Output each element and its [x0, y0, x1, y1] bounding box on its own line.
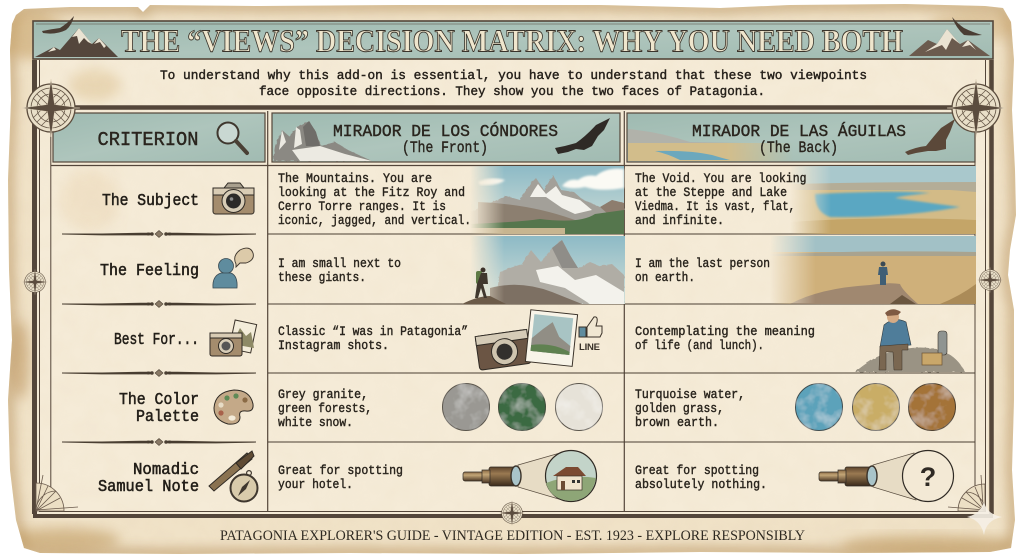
compass small left [22, 269, 48, 295]
text: back palette: golden grass, [635, 401, 724, 416]
row: color palette [119, 384, 956, 430]
text: front best for [278, 324, 468, 353]
compass rose top left [22, 79, 80, 137]
text: front subject: The Mountains. You are [278, 171, 432, 186]
text: front note: Great for spotting [278, 463, 403, 478]
text: back note [635, 463, 767, 492]
text: front subject [278, 171, 471, 228]
intro text [160, 68, 867, 99]
row: the subject: The Subject [102, 191, 199, 210]
text: back feeling [635, 256, 770, 285]
illustration: man sitting on rock with lunch [855, 309, 965, 372]
row dividers [62, 230, 975, 446]
illustration: camera, polaroid and like [475, 310, 602, 370]
text: back subject: Viedma. It is vast, flat, [635, 199, 795, 214]
text: front best for: Instagram shots. [278, 338, 389, 353]
text: front feeling: I am small next to [278, 256, 401, 271]
banner left mountain [35, 28, 118, 57]
swatch: turquoise water [796, 384, 842, 430]
illustration: lone figure on cliff [770, 236, 976, 304]
header: mirador de los condores: (The Front) [402, 139, 488, 157]
compass small bottom [499, 500, 525, 526]
banner right mountain [909, 29, 990, 56]
row: nomadic samuel note: Nomadic [133, 460, 199, 479]
header: criterion: CRITERION [98, 129, 198, 151]
text: front note [278, 463, 403, 492]
header: mirador de las aguilas: (The Back) [759, 139, 838, 157]
outer frame lines [33, 60, 993, 516]
text: front subject: looking at the Fitz Roy and [278, 185, 465, 200]
swatch: white snow [556, 384, 602, 430]
text: back note: absolutely nothing. [635, 477, 767, 492]
icon: artist palette [214, 390, 253, 424]
footer text: PATAGONIA EXPLORER'S GUIDE - VINTAGE EDITION - EST. 1923 - EXPLORE RESPONSIBLY [220, 528, 805, 544]
text: back subject: and infinite. [635, 213, 724, 228]
text: back palette: Turquoise water, [635, 387, 745, 402]
text: back subject [635, 171, 806, 228]
banner left bird [42, 16, 74, 34]
row: color palette: Palette [136, 407, 199, 426]
header: mirador de los condores [272, 113, 620, 162]
header steppe illustration [628, 129, 793, 161]
text: front palette: white snow. [278, 415, 353, 430]
swatch: grey granite [442, 384, 490, 430]
intro text: face opposite directions. They show you the two faces of Patagonia. [259, 84, 765, 99]
row: nomadic samuel note [98, 450, 954, 502]
text: front subject: iconic, jagged, and vertical. [278, 213, 471, 228]
illustration: spyglass seeing hotel [463, 450, 596, 502]
text: front palette: Grey granite, [278, 387, 368, 402]
icon: camera and photo [210, 320, 257, 356]
header: mirador de las aguilas [627, 113, 975, 162]
corner quarter compass bottom left [36, 475, 78, 511]
row: best for: Best For... [114, 330, 199, 349]
swatch: golden grass [852, 384, 900, 430]
row: nomadic samuel note: Samuel Note [98, 477, 199, 496]
sparkle bottom right [967, 501, 1002, 535]
text: front palette [278, 387, 372, 430]
compass small right [977, 267, 1003, 293]
illustration: spyglass seeing nothing [819, 450, 954, 502]
icon: spyglass and compass [209, 451, 258, 502]
row: best for [98, 166, 976, 544]
compass rose top right [947, 79, 1005, 137]
text: back note: Great for spotting [635, 463, 759, 478]
icon: person with speech bubble [213, 248, 253, 288]
illustration: hiker and peaks [470, 236, 625, 304]
icon: thumbs up [579, 317, 602, 337]
title: THE “VIEWS” DECISION MATRIX: WHY YOU NEED BOTH [121, 22, 903, 58]
illustration: spyglass seeing nothing: ? [920, 462, 936, 492]
illustration: mountains with clouds [470, 166, 624, 234]
illustration: steppe with lake [790, 166, 976, 234]
row: the feeling [100, 236, 625, 304]
illustration: camera, polaroid and like: LINE [579, 342, 600, 353]
header: mirador de los condores: MIRADOR DE LOS CÓNDORES [333, 122, 558, 142]
icon: eagle [905, 119, 955, 155]
text: back subject: The Void. You are looking [635, 171, 806, 186]
row: color palette: The Color [119, 390, 199, 409]
text: front feeling: these giants. [278, 270, 366, 285]
swatch: brown earth [908, 384, 956, 430]
icon: lone figure [878, 262, 888, 285]
row: the subject [102, 166, 624, 234]
title banner [33, 16, 993, 59]
icon: camera [213, 183, 254, 214]
corner quarter compass bottom right [948, 475, 985, 511]
text: back feeling: on earth. [635, 270, 695, 285]
icon: magnifying glass [218, 122, 247, 153]
header: criterion [53, 113, 265, 162]
swatch: green forests [498, 384, 546, 430]
header mountain illustration [273, 121, 372, 161]
row: the feeling: The Feeling [100, 261, 199, 280]
text: back subject: at the Steppe and Lake [635, 185, 787, 200]
text: front palette: green forests, [278, 401, 372, 416]
text: back palette: brown earth. [635, 415, 719, 430]
intro text: To understand why this add-on is essential, you have to understand that these two viewpoints [160, 68, 867, 83]
text: back feeling: I am the last person [635, 256, 770, 271]
icon: hiker [462, 268, 506, 304]
icon: condor [555, 118, 610, 154]
banner right bird [952, 17, 982, 36]
text: front note: your hotel. [278, 477, 353, 492]
text: front feeling [278, 256, 401, 285]
header: mirador de las aguilas: MIRADOR DE LAS ÁGUILAS [692, 122, 906, 142]
text: front subject: Cerro Torre ranges. It is [278, 199, 446, 214]
text: back best for [635, 324, 815, 353]
text: back palette [635, 387, 745, 430]
text: front best for: Classic “I was in Patagonia” [278, 324, 468, 339]
text: back best for: of life (and lunch). [635, 338, 764, 353]
text: back best for: Contemplating the meaning [635, 324, 815, 339]
